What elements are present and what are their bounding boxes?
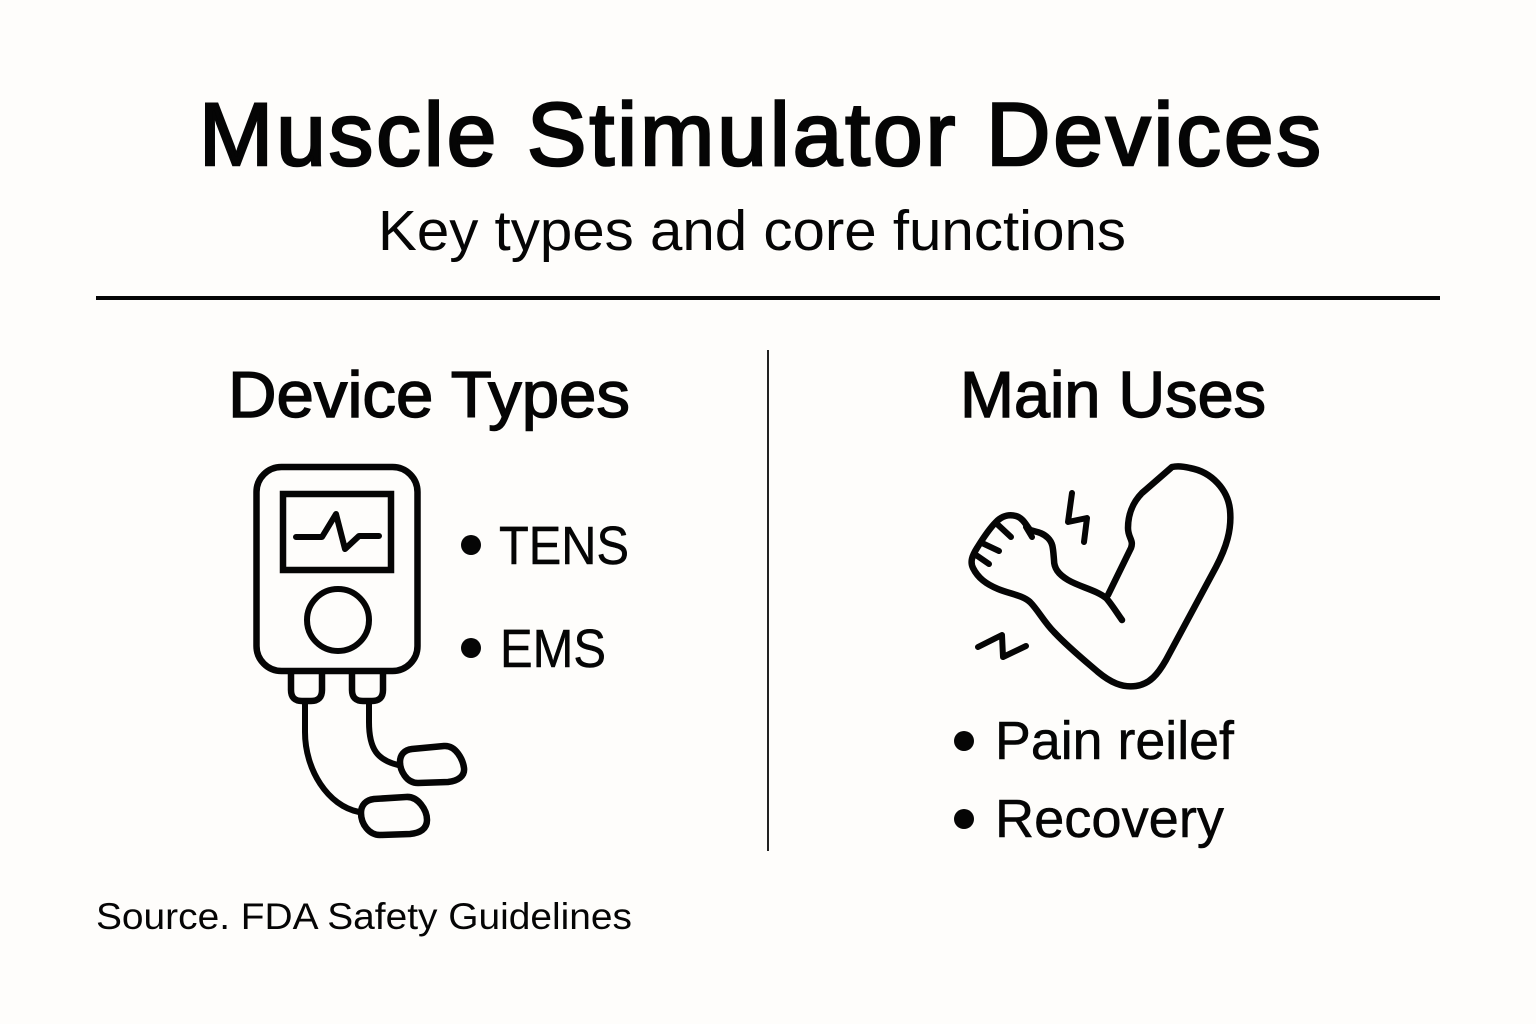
bullet list: device types: TENS xyxy=(499,516,629,576)
icon: stimulator device xyxy=(256,467,464,835)
panel: device types xyxy=(228,358,630,835)
title: Muscle Stimulator Devices xyxy=(199,84,1321,184)
bullet list: device types xyxy=(461,516,629,679)
panel: main uses xyxy=(954,358,1266,849)
source note: Source. FDA Safety Guidelines xyxy=(96,896,632,937)
heading: main uses: Main Uses xyxy=(960,358,1266,431)
icon: flexed arm xyxy=(972,466,1230,686)
bullet list: main uses: Recovery xyxy=(995,789,1224,849)
heading: device types: Device Types xyxy=(228,358,630,431)
bullet list: main uses xyxy=(954,711,1235,849)
bullet list: device types: EMS xyxy=(500,619,606,679)
bullet list: main uses: Pain reilef xyxy=(995,711,1235,771)
subtitle: Key types and core functions xyxy=(378,199,1126,263)
